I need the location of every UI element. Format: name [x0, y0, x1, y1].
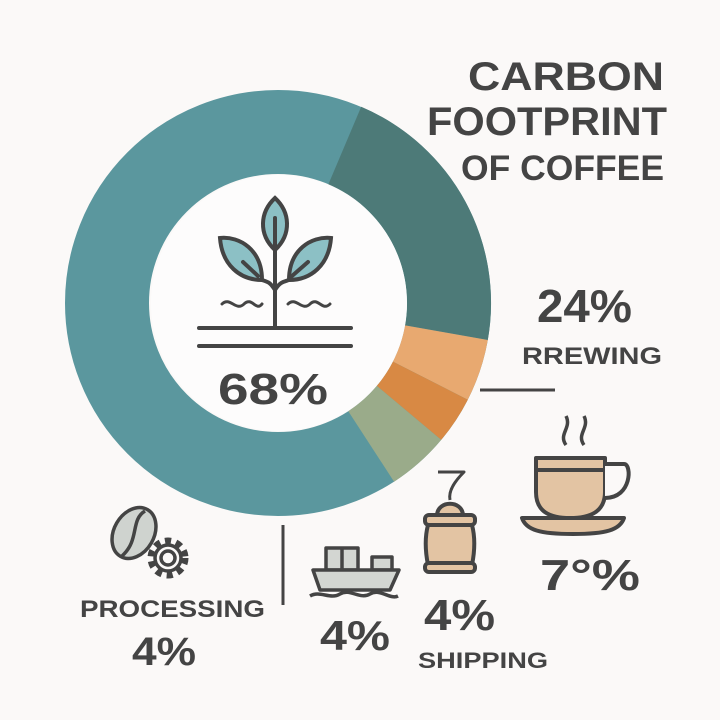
divider line [282, 525, 284, 605]
icon: ship [310, 548, 399, 597]
icon: coffee cup [522, 416, 629, 534]
label: brewing 24%: RREWING [522, 343, 662, 370]
donut chart [107, 107, 491, 482]
label: processing 4% [80, 596, 265, 674]
label: shipping 4% [418, 591, 548, 673]
title: FOOTPRINT [427, 100, 667, 144]
label: processing 4%: 4% [132, 630, 196, 674]
icon: coffee bean and gear [103, 500, 185, 575]
icon: grinder [425, 472, 475, 572]
title: OF COFFEE [461, 149, 664, 188]
label: shipping 4%: SHIPPING [418, 648, 548, 673]
label: brewing 24%: 24% [537, 280, 632, 332]
label: 4% ship: 4% [320, 612, 390, 659]
label: brewing 24% [480, 280, 662, 390]
label: processing 4%: PROCESSING [80, 596, 265, 623]
title: CARBON [468, 55, 664, 99]
icon: plant [199, 198, 351, 346]
label: 7°%: 7°% [540, 551, 640, 600]
title [427, 55, 667, 188]
label: shipping 4%: 4% [424, 591, 495, 640]
center value: 68%: 68% [218, 365, 328, 414]
